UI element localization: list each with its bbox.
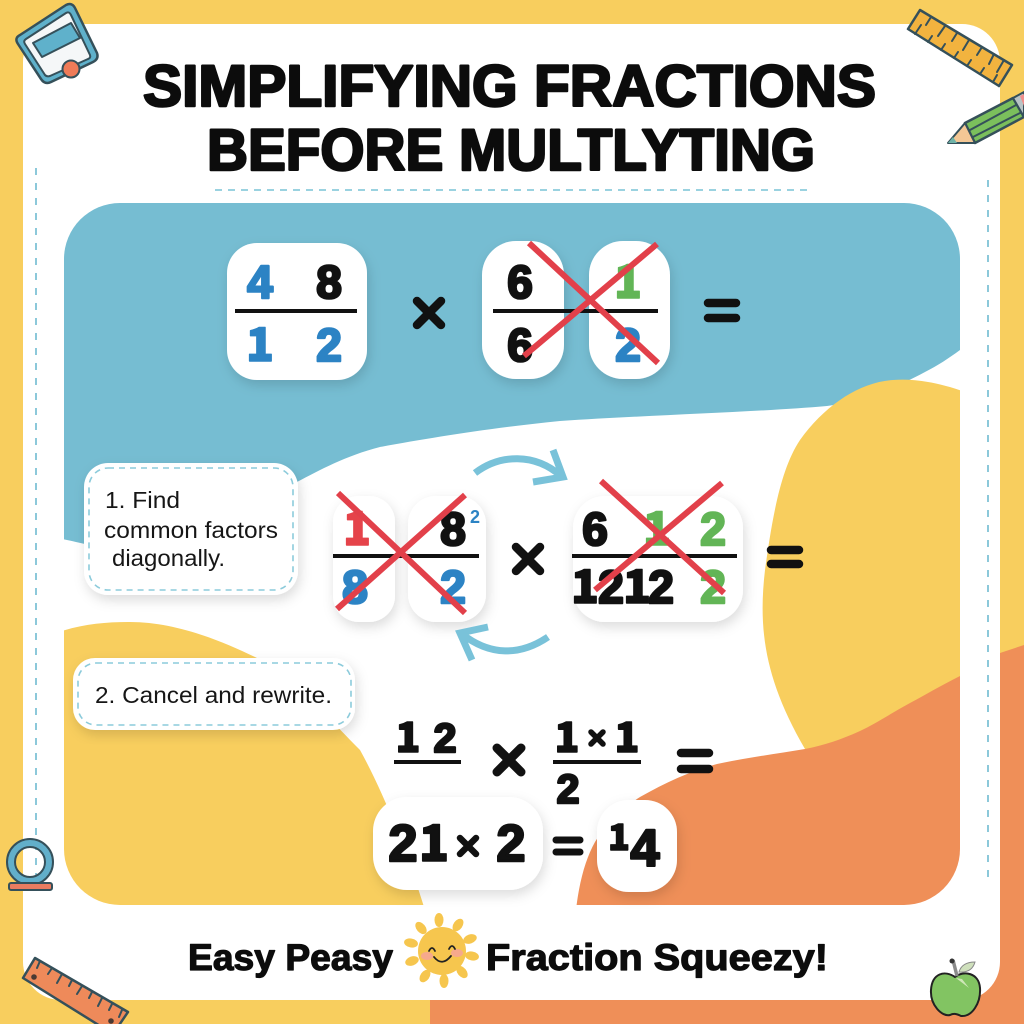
colourful background area	[40, 190, 980, 920]
right fraction card crossed out: 1	[623, 551, 651, 617]
slogan: Fraction Squeezy!	[486, 937, 828, 978]
multiply sign	[497, 748, 521, 772]
right fraction card crossed out: 2	[598, 561, 624, 613]
result card: 1/4: 4	[631, 820, 660, 878]
fraction one half	[394, 704, 461, 764]
left fraction card crossed out: 1	[343, 493, 371, 559]
example row 3	[394, 704, 709, 812]
fraction one half: 2	[434, 715, 456, 761]
result card: 21 x 2: 2	[497, 815, 525, 873]
icon: pencil	[948, 92, 1024, 143]
first fraction card: 8	[316, 256, 342, 308]
yellow right blob	[762, 380, 960, 749]
fraction one times one over two	[553, 704, 641, 812]
equals sign	[681, 753, 709, 769]
first fraction card: 4	[247, 256, 273, 308]
slogan	[188, 937, 828, 978]
example row 1	[227, 241, 736, 380]
equals sign	[708, 303, 736, 318]
right fraction card crossed out: 1	[643, 493, 671, 559]
second fraction card crossed out	[482, 241, 670, 379]
right fraction card crossed out: 6	[582, 503, 608, 555]
second fraction card crossed out: 2	[615, 319, 641, 371]
title: BEFORE MULTLYTING	[207, 118, 815, 183]
right fraction card crossed out: 2	[700, 503, 726, 555]
first fraction card	[227, 243, 367, 380]
result card: 1/4	[597, 800, 677, 892]
equals sign	[556, 840, 580, 852]
callout: step 1	[84, 463, 298, 595]
icon: green apple	[931, 958, 980, 1016]
title	[143, 54, 876, 183]
icon: ruler bottom left	[23, 958, 128, 1024]
first fraction card: 2	[316, 319, 342, 371]
icon: smiling sun	[403, 913, 480, 988]
result card: 1/4: 1	[608, 809, 630, 861]
curved arrow bottom	[460, 627, 548, 660]
right fraction card crossed out	[571, 481, 743, 622]
left fraction card crossed out: 2	[440, 561, 466, 613]
callout: step 1: diagonally.	[112, 545, 225, 571]
fraction one times one over two: 1	[615, 704, 639, 764]
orange corner background	[430, 645, 1024, 1024]
second fraction card crossed out: 6	[507, 256, 533, 308]
left fraction card crossed out: 2	[470, 507, 480, 527]
example row 2	[333, 481, 799, 622]
result card: 21 x 2: 1	[419, 804, 449, 876]
equals sign	[771, 550, 799, 564]
multiply sign	[516, 547, 540, 571]
icon: ruler top right	[908, 10, 1012, 86]
icon: calculator	[16, 4, 97, 83]
callout: step 2: 2. Cancel and rewrite.	[95, 682, 332, 708]
multiply sign	[417, 301, 441, 325]
blue wave shape	[40, 190, 980, 545]
callout: step 1: 1. Find	[105, 487, 180, 513]
result card: 21 x 2	[373, 797, 543, 890]
first fraction card: 1	[246, 309, 274, 375]
right fraction card crossed out: 1	[571, 551, 599, 617]
right fraction card crossed out: 2	[648, 561, 674, 613]
title: SIMPLIFYING FRACTIONS	[143, 54, 876, 119]
left fraction card crossed out: 8	[440, 503, 466, 555]
orange bottom blob	[576, 676, 960, 905]
icon: ring on stand	[7, 839, 53, 890]
callout: step 2	[73, 658, 355, 730]
yellow left blob	[64, 622, 424, 905]
second fraction card crossed out: 6	[507, 319, 533, 371]
slogan: Easy Peasy	[188, 937, 393, 978]
curved arrow top	[475, 450, 563, 482]
fraction one half: 1	[396, 704, 420, 764]
left fraction card crossed out	[333, 493, 486, 622]
fraction one times one over two: 1	[555, 704, 579, 764]
fraction one times one over two: 2	[557, 766, 579, 812]
right fraction card crossed out: 2	[700, 561, 726, 613]
callout: step 1: common factors	[104, 517, 278, 543]
left fraction card crossed out: 8	[342, 561, 368, 613]
result card: 21 x 2: 2	[389, 815, 417, 873]
second fraction card crossed out: 1	[614, 246, 642, 312]
